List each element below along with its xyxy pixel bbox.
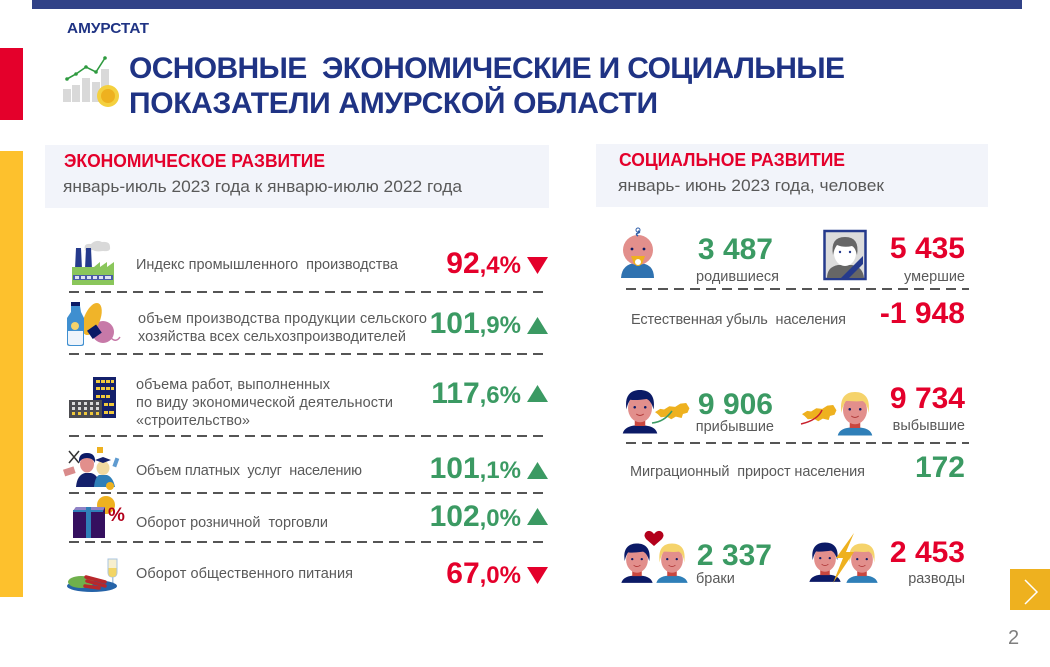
migration gain: 172 (915, 451, 965, 484)
label (138, 311, 427, 345)
value: 3 487 (698, 233, 773, 266)
caption: выбывшие (893, 418, 965, 434)
panel: economic indicators (63, 241, 548, 592)
label: «строительство» (136, 413, 250, 429)
arrow down (527, 257, 548, 274)
label: Индекс промышленного производства (136, 257, 399, 273)
caption: браки (696, 571, 735, 587)
icon: chart with coin (63, 56, 119, 107)
panel: economic header (45, 145, 549, 208)
caption: разводы (908, 571, 965, 587)
page number: 2 (1008, 627, 1019, 649)
panel: economic header: ЭКОНОМИЧЕСКОЕ РАЗВИТИЕ (64, 151, 325, 171)
divorces (809, 533, 965, 587)
icon: baby (621, 228, 654, 278)
row: retail (73, 496, 548, 538)
label: по виду экономической деятельности (136, 395, 393, 411)
caption: родившиеся (696, 269, 779, 285)
deaths (824, 231, 965, 285)
arrow up (527, 385, 548, 402)
value: 102,0% (430, 500, 521, 533)
icon: gift with percent (73, 496, 125, 538)
label: хозяйства всех сельхозпроизводителей (138, 329, 406, 345)
value: 117,6% (431, 377, 521, 410)
value: 92,4% (446, 247, 521, 280)
value: 101,1% (430, 452, 521, 485)
icon: factory (72, 241, 114, 285)
next-page button (1010, 569, 1050, 610)
arrow up (527, 508, 548, 525)
label: объема работ, выполненных (136, 377, 331, 393)
row: agriculture (67, 300, 548, 346)
panel: social header (596, 144, 988, 207)
organisation name: АМУРСТАТ (67, 20, 149, 37)
icon: woman with map (801, 392, 872, 436)
value: 5 435 (890, 232, 965, 265)
icon: couple with heart (621, 531, 688, 583)
icon: plate and glass (67, 559, 117, 592)
arrow down (527, 567, 548, 584)
natural decrease: Естественная убыль населения (631, 312, 846, 328)
icon: couple with lightning (809, 533, 878, 583)
births (621, 228, 779, 285)
value: 2 453 (890, 536, 965, 569)
label (136, 377, 393, 429)
label: Оборот розничной торговли (136, 515, 328, 531)
icon: gift with percent: % (108, 505, 125, 526)
migration gain (630, 451, 965, 484)
panel: economic header: январь-июль 2023 года к январю-июлю 2022 года (63, 177, 463, 196)
arrivals (623, 388, 774, 435)
panel: social header: СОЦИАЛЬНОЕ РАЗВИТИЕ (619, 150, 845, 170)
icon: man with map (623, 390, 689, 434)
label: Объем платных услуг населению (136, 463, 362, 479)
value: 2 337 (697, 539, 772, 572)
title: ПОКАЗАТЕЛИ АМУРСКОЙ ОБЛАСТИ (129, 86, 658, 120)
marriages (621, 531, 772, 587)
yellow side accent (0, 151, 23, 597)
natural decrease: -1 948 (880, 297, 965, 330)
title (129, 52, 845, 120)
red side accent (0, 48, 23, 120)
caption: умершие (904, 269, 965, 285)
label: объем производства продукции сельского (138, 311, 427, 327)
arrow up (527, 462, 548, 479)
row: catering (67, 557, 548, 592)
value: 101,9% (430, 307, 521, 340)
icon: milk, bread, wool (67, 300, 120, 346)
natural decrease (631, 297, 965, 330)
title: ОСНОВНЫЕ ЭКОНОМИЧЕСКИЕ И СОЦИАЛЬНЫЕ (129, 52, 845, 85)
icon: portrait (824, 231, 866, 279)
panel: social header: январь- июнь 2023 года, человек (618, 176, 885, 195)
value: 9 734 (890, 382, 965, 415)
panel: social indicators (621, 228, 965, 587)
migration gain: Миграционный прирост населения (630, 464, 865, 480)
top bar (32, 0, 1022, 9)
value: 67,0% (446, 557, 521, 590)
value: 9 906 (698, 388, 773, 421)
row: paid services (63, 447, 548, 490)
arrow up (527, 317, 548, 334)
icon: service people (63, 447, 119, 490)
row: industrial production (72, 241, 548, 285)
departures (801, 382, 965, 436)
icon: buildings (69, 377, 116, 418)
row: construction (69, 377, 548, 429)
caption: прибывшие (696, 419, 774, 435)
label: Оборот общественного питания (136, 566, 353, 582)
